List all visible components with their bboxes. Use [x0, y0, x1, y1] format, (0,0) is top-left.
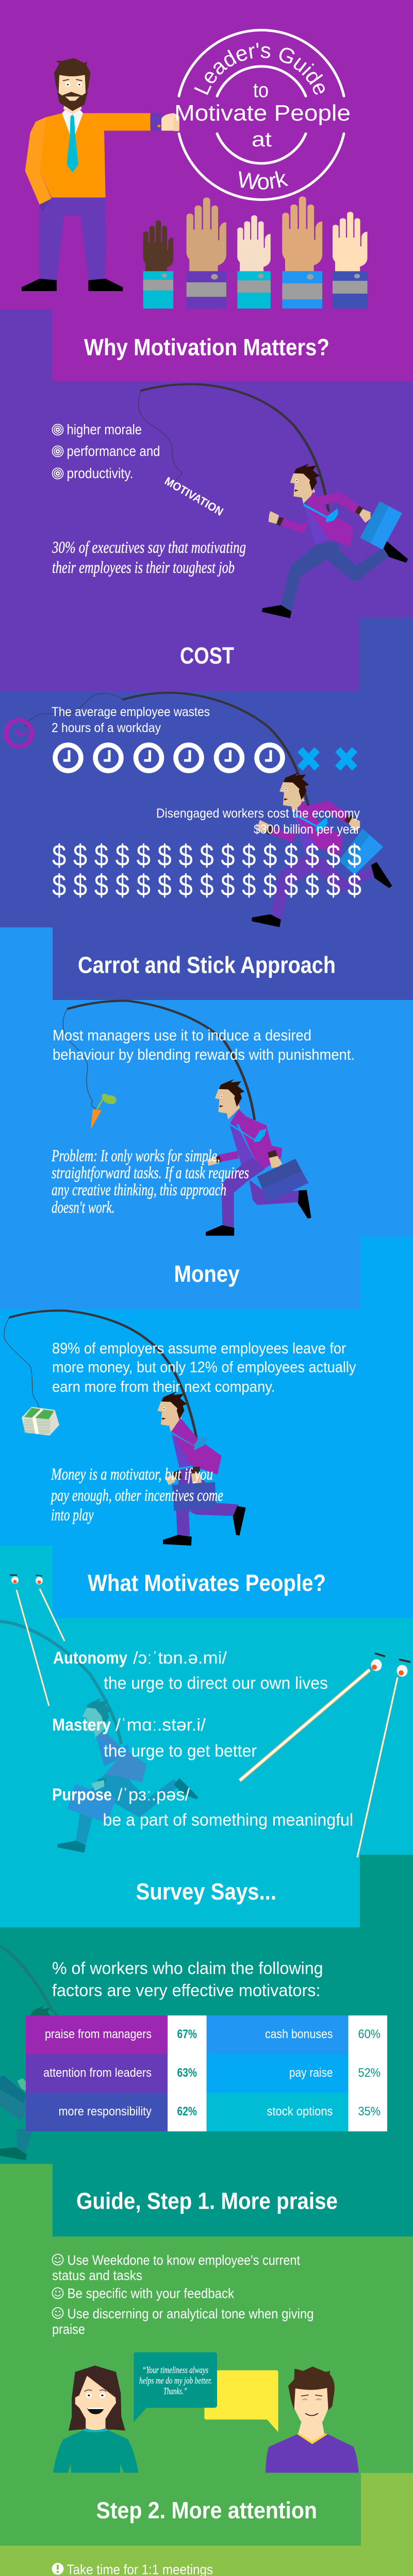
- chart: dollar rows: [52, 839, 361, 902]
- list: praise tips: praise: [52, 2321, 85, 2337]
- table: survey factors and percentages: 67%: [177, 2027, 197, 2041]
- text: managers use rewards: [53, 1027, 355, 1063]
- text: employers assumption about pay: earn more from their next company.: [52, 1379, 275, 1395]
- callout: money is a motivator: Money is a motivator, but if you: [51, 1465, 213, 1484]
- list: motivation benefits: [53, 421, 160, 481]
- title badge: Leader's Guide to Motivate People at Work: to: [253, 79, 269, 102]
- table: survey factors and percentages: cash bonuses: [265, 2027, 333, 2041]
- list: praise tips: Be specific with your feedback: [67, 2285, 234, 2301]
- icon: motivation lure word: MOTIVATION: [162, 474, 225, 518]
- callout: problem with carrot and stick: [51, 1147, 249, 1217]
- callout: problem with carrot and stick: straightforward tasks. If a task requires: [52, 1164, 249, 1182]
- text: disengaged workers cost: [156, 806, 360, 837]
- text: wasted hours: [52, 705, 210, 735]
- title badge: Leader's Guide to Motivate People at Work: Leader's Guide: [194, 43, 325, 95]
- list: praise tips: [52, 2252, 313, 2337]
- panel: carrot and stick: [0, 927, 413, 1319]
- table: survey factors and percentages: more responsibility: [59, 2105, 152, 2119]
- illustration: faded rod and runner: [0, 1946, 58, 2160]
- illustration: woman: [53, 2365, 139, 2473]
- panel: cost: [0, 618, 413, 1010]
- callout: executives stat: 30% of executives say that motivating: [52, 538, 246, 557]
- text: purpose: /ˈpɜː.pəs/: [118, 1785, 190, 1804]
- illustration: man: [266, 2367, 359, 2473]
- text: autonomy: [53, 1648, 328, 1692]
- panel: survey says: [0, 1855, 413, 2246]
- text: managers use rewards: Most managers use it to induce a desired: [53, 1027, 311, 1044]
- illustration: runner chasing carrot: [63, 1001, 311, 1235]
- callout: praise speech bubbles: Thanks.”: [163, 2386, 187, 2396]
- text: purpose: be a part of something meaningful: [103, 1810, 353, 1829]
- panel: what motivates people: [0, 1546, 413, 1937]
- callout: executives stat: their employees is their toughest job: [52, 558, 235, 577]
- text: autonomy: Autonomy: [53, 1648, 128, 1667]
- title badge: Leader's Guide to Motivate People at Work: Work: [239, 171, 289, 190]
- illustration: runner chasing clock: [6, 693, 392, 927]
- list: praise tips: status and tasks: [52, 2268, 142, 2283]
- callout: money is a motivator: into play: [51, 1506, 94, 1524]
- table: survey factors and percentages: 62%: [177, 2105, 197, 2119]
- text: wasted hours: The average employee wastes: [52, 705, 210, 719]
- illustration: runner chasing motivation on a rod: [139, 384, 408, 618]
- title badge: Leader's Guide to Motivate People at Work: at: [252, 128, 272, 151]
- callout: money is a motivator: [51, 1465, 223, 1524]
- illustration: right eye sticks: [240, 1653, 410, 1857]
- text: autonomy: the urge to direct our own lives: [104, 1673, 328, 1692]
- list: motivation benefits: productivity.: [67, 465, 133, 481]
- illustration: faded runner: [58, 1698, 199, 1853]
- text: survey intro: % of workers who claim the following: [52, 1959, 323, 1977]
- callout: praise speech bubbles: [134, 2352, 278, 2432]
- list: praise tips: Use discerning or analytical tone when giving: [67, 2306, 313, 2321]
- heading: step 2: Step 2. More attention: [96, 2497, 317, 2523]
- panel: step 1 more praise: [0, 2164, 413, 2555]
- title badge: Leader's Guide to Motivate People at Work: Motivate People: [174, 100, 351, 126]
- chart: dollar rows: $ $ $ $ $ $ $ $ $ $ $ $ $ $ $: [52, 869, 361, 902]
- illustration: presenter man pointing: [22, 58, 179, 291]
- panel: step 2 more attention: [0, 2473, 413, 2576]
- text: purpose: Purpose: [52, 1785, 112, 1804]
- heading: why motivation matters: Why Motivation Matters?: [84, 334, 329, 361]
- text: mastery: /ˈmɑː.stər.i/: [115, 1715, 206, 1734]
- illustration: faded rod: [0, 1621, 121, 1744]
- callout: money is a motivator: pay enough, other incentives come: [51, 1486, 223, 1505]
- chart: dollar rows: $ $ $ $ $ $ $ $ $ $ $ $ $ $ $: [52, 839, 361, 872]
- text: autonomy: /ɔːˈtɒn.ə.mi/: [133, 1648, 227, 1667]
- table: survey factors and percentages: 52%: [358, 2066, 381, 2080]
- table: survey factors and percentages: 63%: [177, 2066, 197, 2080]
- callout: executives stat: [52, 538, 246, 577]
- table: survey factors and percentages: 35%: [358, 2105, 381, 2119]
- text: survey intro: factors are very effective motivators:: [52, 1980, 321, 2000]
- text: mastery: Mastery: [52, 1715, 111, 1734]
- illustration: left eye sticks: [10, 1574, 64, 1706]
- heading: money: Money: [174, 1261, 239, 1287]
- table: survey factors and percentages: praise from managers: [45, 2027, 152, 2041]
- text: mastery: [52, 1715, 257, 1760]
- panel: why motivation matters: [0, 309, 413, 701]
- heading: survey says: Survey Says...: [136, 1878, 276, 1905]
- text: purpose: [52, 1785, 353, 1829]
- list: attention tips: [52, 2562, 322, 2576]
- callout: praise speech bubbles: helps me do my job better.: [139, 2375, 212, 2385]
- heading: guide step 1: Guide, Step 1. More praise: [76, 2188, 338, 2214]
- heading: carrot and stick: Carrot and Stick Approach: [78, 952, 336, 978]
- text: employers assumption about pay: more money, but only 12% of employees actually: [52, 1359, 356, 1376]
- table: survey factors and percentages: attention from leaders: [43, 2066, 152, 2080]
- table: survey factors and percentages: 60%: [358, 2027, 381, 2041]
- table: survey factors and percentages: [26, 2015, 387, 2131]
- list: praise tips: Use Weekdone to know employee's current: [67, 2252, 300, 2268]
- text: employers assumption about pay: [52, 1340, 356, 1395]
- callout: praise speech bubbles: “Your timeliness always: [142, 2365, 208, 2375]
- panel: money: [0, 1236, 413, 1628]
- text: disengaged workers cost: Disengaged workers cost the economy: [156, 806, 360, 821]
- heading: what motivates people: What Motivates People?: [88, 1570, 326, 1596]
- text: managers use rewards: behaviour by blending rewards with punishment.: [53, 1046, 355, 1063]
- list: motivation benefits: higher morale: [67, 421, 142, 437]
- text: employers assumption about pay: 89% of employers assume employees leave for: [52, 1340, 346, 1357]
- illustration: raised hands: [143, 196, 368, 309]
- illustration: runner chasing cash: [4, 1311, 246, 1546]
- list: motivation benefits: performance and: [67, 443, 160, 459]
- chart: six working hours and two wasted: [55, 745, 355, 771]
- callout: problem with carrot and stick: doesn't work.: [52, 1198, 114, 1217]
- table: survey factors and percentages: pay raise: [289, 2066, 333, 2080]
- callout: problem with carrot and stick: Problem: It only works for simple,: [51, 1147, 220, 1165]
- text: wasted hours: 2 hours of a workday: [52, 721, 161, 735]
- text: survey intro: [52, 1959, 323, 2000]
- text: disengaged workers cost: $300 billion per year: [254, 822, 360, 837]
- panel: header: [0, 0, 413, 381]
- text: mastery: the urge to get better: [104, 1741, 257, 1760]
- table: survey factors and percentages: stock options: [267, 2105, 333, 2119]
- title badge: Leader's Guide to Motivate People at Work: [174, 29, 351, 201]
- callout: problem with carrot and stick: any creative thinking, this approach: [52, 1181, 226, 1199]
- heading: cost: COST: [180, 642, 234, 669]
